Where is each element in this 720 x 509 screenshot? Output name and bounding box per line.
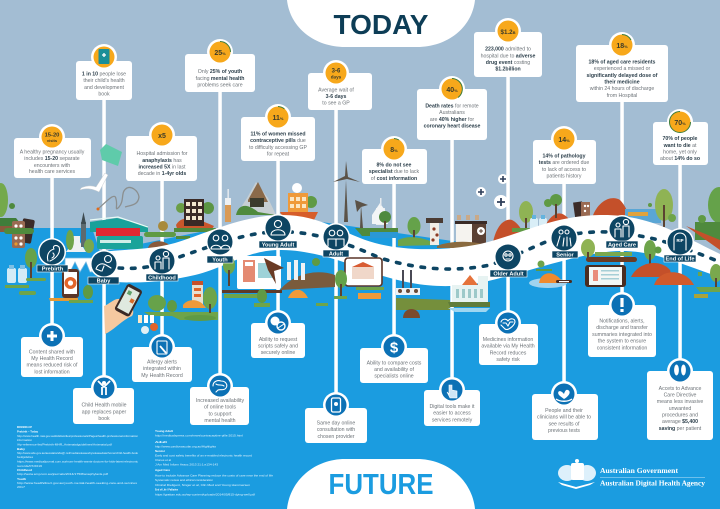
future card: shared record: My Health Record bbox=[31, 356, 73, 362]
today card: 70%: home, yet only bbox=[663, 149, 697, 155]
today card: 15-20 visits: 15-20 bbox=[45, 132, 59, 138]
future card: allergy alerts: My Health Record bbox=[141, 373, 183, 379]
today card: 14% bbox=[533, 126, 596, 184]
reference list, left column: Baby bbox=[17, 447, 25, 451]
reference list, right column: https://grattan.edu.au/wp-content/uploads/2014/05/815-dying-well.pdf bbox=[155, 492, 255, 496]
reference list, left column: Childhood bbox=[17, 468, 32, 472]
future card: advance care directive: procedures and bbox=[662, 412, 698, 418]
future card: compare costs: Ability to compare costs bbox=[367, 360, 422, 366]
red hill and leafy tree bbox=[544, 194, 570, 228]
future card: advance care directive: average $5,400 bbox=[662, 419, 698, 425]
reference list, left column: https://www.medicaljournal.com.au/mum-health-wants-doctors-for-kids-latest-electronic bbox=[17, 460, 139, 464]
today card: 40%: 40% bbox=[446, 87, 458, 94]
today card: 14%: patients history bbox=[547, 173, 582, 179]
future card: notifications: the system to ensure bbox=[598, 338, 646, 344]
future card: advance care directive: unwanted bbox=[669, 406, 691, 412]
tree and red hills bbox=[631, 240, 702, 285]
future card: medicines information: Medicines information bbox=[483, 337, 533, 343]
today card: 25%: problems seek care bbox=[197, 82, 243, 88]
future card: mental health tools bbox=[190, 373, 249, 425]
reference list, left column: 2017 bbox=[17, 485, 25, 489]
Australian Government logo: Australian Digital Health Agency bbox=[600, 480, 705, 488]
future card: compare costs: $ bbox=[390, 340, 399, 356]
future card: same day consultation: consultation with bbox=[317, 427, 355, 433]
future card: notifications: summaries integrated into bbox=[592, 332, 652, 338]
today card: 11%: for repeat bbox=[267, 151, 290, 157]
future card: compare costs bbox=[360, 334, 428, 383]
reference list, left column: Prebirth – Today bbox=[17, 430, 38, 434]
future card: results of tests: previous tests bbox=[548, 428, 580, 434]
reference list, left column: http://www.amj.com.au/journals/2014/175/8/anaphylaxis.pdf bbox=[17, 472, 108, 476]
today card: 25%: facing mental health bbox=[196, 76, 244, 82]
today card: x5: Hospital admission for bbox=[136, 151, 188, 157]
reference list, left column: records/07/2016 bbox=[17, 464, 42, 468]
reference list, right column: Clones et al bbox=[155, 458, 171, 462]
today card: 11%: 11% of women missed bbox=[250, 131, 306, 137]
reference list, right column: Clinical Dieligent, Singer et al, Clin Med and Young Hammersen bbox=[155, 483, 250, 487]
today card: 1 in 10: and development bbox=[84, 85, 124, 91]
icon: floating teal book bbox=[100, 144, 122, 166]
future card: advance care directive: Accets to Advance bbox=[659, 386, 701, 392]
icon: phone with lifebuoy bbox=[49, 269, 93, 303]
node: Youth bbox=[206, 228, 234, 264]
today card: x5: x5 bbox=[158, 133, 166, 140]
today card: 40%: are 40% higher for bbox=[430, 117, 474, 123]
oil rig on land bbox=[396, 270, 450, 318]
today card: 18% bbox=[576, 32, 668, 102]
reference list, left column: /Ap-reference-list/Prebirth-MHR_Antenatalguidelines/Antenatal.pdf bbox=[17, 442, 112, 446]
today card: $1.2B: hospital due to adverse bbox=[481, 53, 536, 59]
today card: 3-6 days: Average wait of bbox=[318, 87, 354, 93]
today card: 25%: Only 25% of youth bbox=[198, 69, 242, 75]
node: Aged Care bbox=[606, 215, 638, 248]
today card: x5: increased 5X in last bbox=[138, 164, 186, 170]
today card: 18%: experienced a missed or bbox=[594, 66, 651, 72]
pharmacy shop bbox=[437, 215, 492, 248]
today card: 3-6 days bbox=[308, 60, 372, 110]
future card: digital tools bbox=[424, 377, 480, 426]
today card: 14%: 14% bbox=[558, 137, 570, 144]
node: End of Life bbox=[664, 228, 696, 262]
today card: 40%: Australians bbox=[439, 110, 465, 116]
senior island bbox=[529, 260, 572, 288]
flask and tower bbox=[66, 212, 94, 253]
reference list, left column: http://www.abs.gov.au/ausstats/abs@.nsf/mediareleasesbyreleasedate/home/child-health-book bbox=[17, 451, 138, 455]
plus icons bbox=[476, 174, 508, 209]
icon: stack of books bbox=[90, 217, 148, 249]
today card: 25% bbox=[185, 39, 255, 92]
today card: 18%: from Hospital bbox=[607, 93, 637, 99]
today card: 70%: about 14% do so bbox=[660, 156, 700, 162]
candle tower bbox=[225, 189, 231, 222]
today card: 15-20 visits: visits bbox=[47, 138, 58, 143]
icon: stethoscope bbox=[96, 187, 139, 210]
reference list, right column: Senior bbox=[155, 449, 166, 453]
icon: open white book bbox=[80, 173, 108, 192]
node: Adult bbox=[322, 223, 350, 258]
today card: 15-20 visits: A healthy pregnancy usually bbox=[20, 149, 85, 155]
today card: 8%: specialist due to lack bbox=[369, 169, 419, 175]
today card: 8%: of cost information bbox=[371, 176, 417, 182]
future card: advance care directive: saving per patient bbox=[659, 426, 702, 432]
reference list, left column: http://www.healthdirect.gov.au/youth-mental-health-seeking-care-and-services bbox=[17, 481, 138, 485]
small island tree bbox=[144, 221, 190, 248]
node: Senior: Senior bbox=[556, 252, 575, 258]
node: End of Life: RIP bbox=[677, 238, 684, 243]
today card: 8%: 8% bbox=[390, 147, 398, 154]
today card: $1.2B: $1.2billion bbox=[495, 66, 521, 72]
left tree and land bbox=[0, 183, 24, 232]
today card: 70%: want to die at bbox=[663, 143, 697, 149]
icon: medication phone bbox=[585, 265, 626, 287]
today card: 11%: contraceptive pills due bbox=[250, 138, 306, 144]
today card: $1.2B: 223,000 admitted to bbox=[485, 46, 531, 52]
future card: same day consultation: chosen provider bbox=[318, 434, 355, 440]
title banner: FUTURE: FUTURE bbox=[328, 469, 434, 501]
reference list, left column: Youth bbox=[17, 477, 26, 481]
future card: shared record: means reduced risk of bbox=[26, 362, 78, 368]
today card: 11%: 11% bbox=[273, 115, 284, 122]
orange hospital bbox=[280, 183, 318, 220]
future card: mental health tools: Increased availability bbox=[196, 398, 244, 404]
future card: online scripts bbox=[251, 310, 305, 358]
future card: online scripts: scripts safely and bbox=[258, 343, 298, 349]
right edge land bbox=[686, 187, 720, 250]
today card: x5: anaphylaxis has bbox=[142, 158, 182, 164]
node: Baby: Baby bbox=[97, 278, 111, 284]
today card: 1 in 10: their child's health bbox=[83, 78, 125, 84]
reference list, left column: REFERENCE LIST bbox=[17, 425, 32, 429]
childhood island bbox=[144, 281, 218, 321]
future card: medicines information bbox=[479, 310, 538, 365]
scenery below the road bbox=[4, 228, 720, 334]
reference list, left column bbox=[17, 425, 139, 489]
future card: same day consultation: Same day online bbox=[317, 420, 355, 426]
red hill with tree bbox=[492, 201, 533, 250]
today card: 15-20 visits: health care services bbox=[29, 169, 75, 175]
future card: allergy alerts: integrated within bbox=[143, 366, 181, 372]
wind turbines bbox=[333, 161, 368, 228]
today card: 3-6 days: days bbox=[331, 74, 342, 80]
future card: results of tests: clinicians will be able to bbox=[537, 414, 591, 420]
future card: compare costs: and availability of bbox=[374, 367, 414, 373]
brown apartment building bbox=[174, 199, 216, 232]
church bbox=[355, 198, 398, 238]
youth tablet and megaphone bbox=[222, 256, 284, 307]
hospital complex bbox=[448, 275, 490, 312]
node: Childhood bbox=[146, 247, 178, 282]
future card: shared record: Content shared with bbox=[29, 349, 75, 355]
today card: 15-20 visits: includes 15-20 separate bbox=[24, 156, 80, 162]
icon: hand holding phone bbox=[104, 283, 143, 334]
today card: x5 bbox=[126, 122, 197, 181]
future card: results of tests: People and their bbox=[545, 408, 583, 414]
future card: notifications: Notifications, alerts, bbox=[599, 318, 645, 324]
today card: 8% bbox=[362, 136, 427, 184]
reference list, right column: Systematic review and ethical consideration bbox=[155, 478, 213, 482]
title banner: TODAY: TODAY bbox=[334, 9, 429, 40]
node: Senior bbox=[550, 224, 578, 258]
today card: 40% bbox=[417, 76, 487, 140]
icon: pill packets bbox=[12, 218, 35, 248]
today card: 8%: 8% do not see bbox=[377, 162, 412, 168]
water and tree by aged care bbox=[625, 189, 676, 227]
future card: advance care directive: Care Directive bbox=[664, 392, 697, 398]
today card: 14%: 14% of pathology bbox=[543, 153, 586, 159]
today card: $1.2B bbox=[474, 18, 542, 77]
icon: allergy pills bbox=[138, 315, 158, 334]
today card: 70%: 70% bbox=[674, 120, 686, 127]
future card: medicines information: available via My Health bbox=[481, 343, 535, 349]
crest bbox=[558, 459, 596, 489]
today card: $1.2B: $1.2B bbox=[501, 29, 516, 36]
striped awning bbox=[65, 258, 92, 272]
milk bottles bbox=[530, 215, 547, 231]
today card: 18%: significantly delayed dose of bbox=[587, 73, 658, 79]
future card: child health app bbox=[73, 375, 134, 424]
today card: 14%: to lack of access to bbox=[542, 167, 586, 173]
today card: 11%: to difficulty accessing GP bbox=[249, 145, 307, 151]
node: Young Adult: Young Adult bbox=[262, 242, 294, 248]
sky background bbox=[0, 0, 720, 256]
adult tablet bbox=[334, 258, 384, 299]
white road bbox=[100, 215, 720, 286]
future card: digital tools: Digital tools make it bbox=[430, 404, 475, 410]
future card: online scripts: Ability to request bbox=[259, 337, 298, 343]
future card: advance care directive: means less invasive bbox=[657, 399, 703, 405]
Australian Government logo: Australian Government bbox=[600, 466, 678, 475]
future card: allergy alerts: Allergy alerts bbox=[147, 359, 177, 365]
reference list, right column: http://medicalxpress.com/news/contraceptive-pills-2015.html bbox=[155, 434, 243, 438]
today card: x5: decade in 1-4yr olds bbox=[138, 171, 186, 177]
today card: 18%: 18% of aged care residents bbox=[589, 59, 656, 65]
title banner: TODAY bbox=[287, 0, 475, 47]
future card: digital tools: services remotely bbox=[432, 417, 473, 423]
today card: 25%: 25% bbox=[214, 50, 226, 57]
aged care tree and bar bbox=[581, 239, 637, 262]
today card: 70%: 70% of people bbox=[663, 136, 698, 142]
node: Aged Care: Aged Care bbox=[608, 242, 636, 248]
reference list, right column bbox=[155, 429, 273, 496]
node: Young Adult bbox=[259, 214, 297, 248]
today card: 18%: within 24 hours of discharge bbox=[590, 86, 654, 92]
today card: 40%: Death rates for remote bbox=[425, 103, 479, 109]
scenery above the road bbox=[0, 144, 720, 253]
today card: 3-6 days: 3-6 days bbox=[326, 94, 346, 100]
future card: mental health tools: to support bbox=[208, 411, 232, 417]
reference list, right column: Aged Care bbox=[155, 468, 170, 472]
node: Older Adult bbox=[490, 243, 527, 278]
today card: 70% bbox=[653, 109, 708, 165]
title banner: FUTURE bbox=[287, 459, 475, 509]
dashed journey line bbox=[119, 232, 720, 269]
reference list, right column: Adult bbox=[155, 440, 167, 444]
reference list, right column: How to include Advance Care Planning reduce the costs of care near the end of life bbox=[155, 474, 273, 478]
trees and totem bbox=[398, 217, 443, 246]
today card: 18%: their medicine bbox=[604, 79, 640, 85]
milk bottles left bbox=[5, 265, 36, 295]
today card: 40%: coronary heart disease bbox=[424, 123, 481, 129]
reference list, left column: book/guidelines bbox=[17, 455, 33, 459]
future card: medicines information: safety risk bbox=[496, 357, 520, 363]
reference list, left column: http://www.health.nsw.gov.au/kidsfamilies/professionals/Pages/health-professional-information bbox=[17, 434, 138, 438]
node: Childhood: Childhood bbox=[148, 276, 176, 282]
node: Adult: Adult bbox=[329, 252, 343, 258]
future card: shared record: lost information bbox=[34, 369, 70, 375]
node: Prebirth bbox=[37, 238, 68, 272]
pill packets bbox=[573, 201, 590, 217]
future card: mental health tools: of online tools bbox=[204, 404, 236, 410]
future card: allergy alerts bbox=[132, 334, 192, 382]
future card: notifications bbox=[588, 292, 656, 357]
reference list, right column: Early and cost safety benefits of an e-enabled electronic health record bbox=[155, 454, 252, 458]
node: End of Life: End of Life bbox=[666, 256, 694, 262]
today card: 3-6 days: 3-6 bbox=[332, 68, 341, 74]
node: Youth: Youth bbox=[212, 258, 228, 264]
future card: medicines information: Record reduces bbox=[490, 350, 527, 356]
future card: child health app: book bbox=[98, 416, 110, 422]
today card: 11% bbox=[241, 104, 315, 161]
today card: 1 in 10 bbox=[76, 44, 132, 100]
future card: online scripts: securely online bbox=[261, 350, 295, 356]
today card: 1 in 10: book bbox=[98, 91, 110, 97]
right edge tree bbox=[694, 264, 720, 298]
today card: 3-6 days: to see a GP bbox=[322, 100, 350, 106]
reference list, right column: End of Life / Palliative bbox=[155, 488, 178, 492]
today card: 15-20 visits bbox=[14, 124, 91, 178]
Australian Government logo bbox=[558, 459, 705, 489]
today card: 1 in 10: 1 in 10 people lose bbox=[82, 71, 126, 77]
future card: same day consultation bbox=[305, 392, 367, 443]
future card: notifications: consistent information bbox=[597, 345, 647, 351]
node: Baby bbox=[88, 250, 119, 284]
reference list, right column: J Am Med Inform Assoc 2013 21:1:e134-143 bbox=[155, 462, 218, 466]
reference list, right column: http://www.cardiovascular.org.au/Highlights bbox=[155, 444, 217, 448]
future card: shared record bbox=[21, 323, 83, 377]
tree left bbox=[4, 228, 46, 281]
today card: 14%: tests are ordered due bbox=[539, 160, 589, 166]
future card: results of tests bbox=[532, 381, 598, 440]
node: Older Adult: Older Adult bbox=[493, 272, 524, 278]
towers and hill bbox=[280, 258, 335, 306]
future card: compare costs: specialists online bbox=[374, 373, 414, 379]
today card: $1.2B: drug event costing bbox=[486, 60, 530, 66]
today card: 18%: 18% bbox=[616, 43, 628, 50]
future card: child health app: Child Health mobile bbox=[82, 402, 127, 408]
future card: mental health tools: mental health bbox=[204, 418, 236, 424]
reference list, left column: information bbox=[17, 438, 32, 442]
node: Prebirth: Prebirth bbox=[42, 266, 64, 272]
large red hill bbox=[592, 198, 629, 218]
future card: results of tests: see results of bbox=[549, 421, 580, 427]
future card: digital tools: easier to access bbox=[433, 410, 471, 416]
connector poles bbox=[50, 72, 682, 407]
reference list, right column: Young Adult bbox=[155, 429, 173, 433]
future card: advance care directive bbox=[647, 358, 713, 440]
future card: child health app: app replaces paper bbox=[82, 409, 126, 415]
today card: 15-20 visits: encounters with bbox=[34, 163, 70, 169]
mountain scene bbox=[236, 182, 276, 215]
future card: notifications: discharge and transfer bbox=[596, 325, 648, 331]
